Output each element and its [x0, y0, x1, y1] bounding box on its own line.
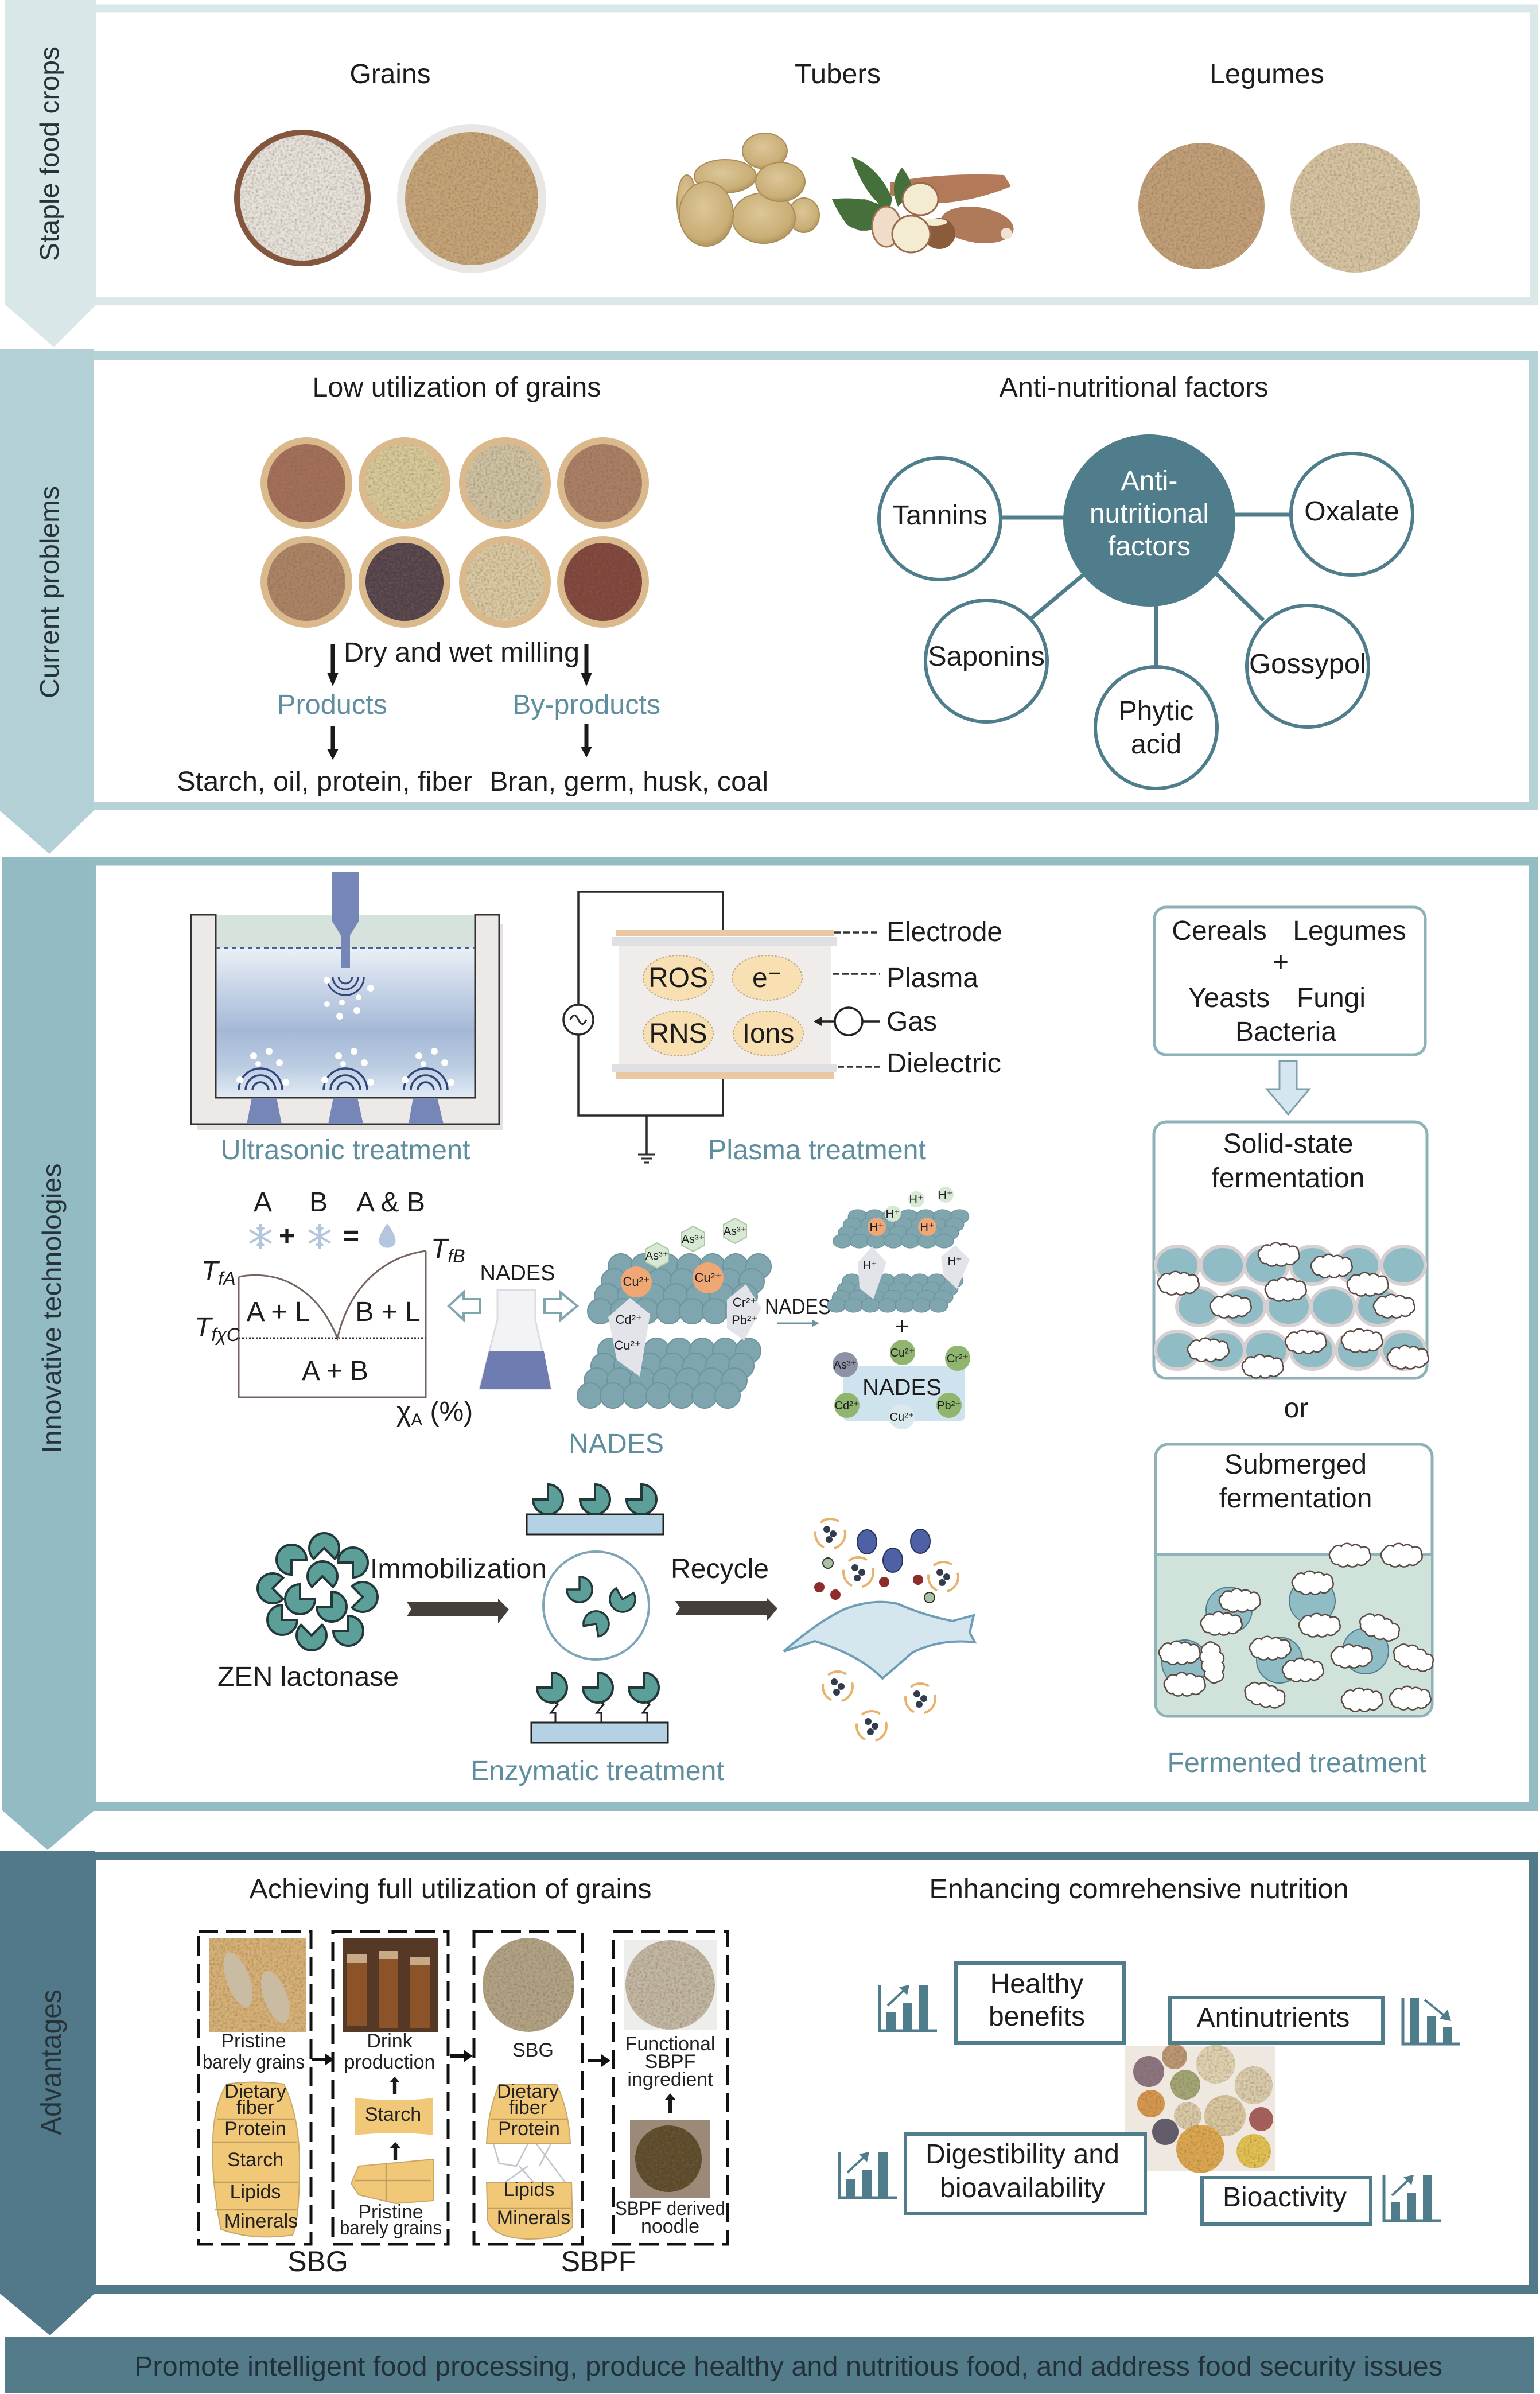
label: immobilization: Immobilization — [370, 1554, 547, 1584]
node: oxalate — [1291, 453, 1413, 575]
arrow: immobilization — [407, 1599, 509, 1623]
diagram: NADES with captured ions: Cu²⁺ — [890, 1347, 915, 1359]
dashed box: SBPF ingredient: noodle — [641, 2216, 699, 2237]
text: by-product list: Bran, germ, husk, coal — [489, 767, 768, 797]
box: antinutrients — [1170, 1997, 1383, 2043]
text: or: or — [1284, 1393, 1308, 1424]
node: saponins: Saponins — [928, 642, 1045, 672]
node: gossypol: Gossypol — [1249, 649, 1366, 679]
photo: eight grain bowls — [260, 437, 649, 628]
panel: innovative technologies — [2, 857, 1533, 1850]
dashed box: drink production: Pristine — [358, 2201, 423, 2223]
dashed box: pristine barley composition: fiber — [236, 2097, 274, 2119]
diagram: regenerated layers: H⁺ — [920, 1221, 934, 1234]
label: enzymatic treatment: Enzymatic treatment — [470, 1756, 724, 1786]
arrows: milling — [327, 644, 592, 686]
illustration: enzyme film and toxins — [784, 1519, 975, 1741]
panel: advantages — [0, 1851, 1533, 2335]
dashed box: pristine barley composition: Pristine — [221, 2030, 286, 2052]
arrow: recycle — [675, 1598, 777, 1622]
node: gossypol — [1247, 605, 1368, 727]
node: phytic acid: acid — [1131, 729, 1181, 760]
diagram: NADES with captured ions: As³⁺ — [834, 1359, 857, 1371]
diagram: NADES with captured ions: Cr²⁺ — [947, 1353, 969, 1365]
immobilized enzyme: top plate — [527, 1484, 663, 1534]
node: tannins: Tannins — [892, 500, 987, 531]
box: fermentation inputs: Yeasts — [1188, 983, 1270, 1013]
box: digestibility and bioavailability: Digestibility and — [925, 2139, 1119, 2170]
arrow: box 3 to 4 — [588, 2054, 610, 2067]
box: solid-state fermentation: fermentation — [1212, 1163, 1364, 1194]
diagram: plasma reactor: e⁻ — [752, 963, 782, 993]
box: fermentation inputs: Cereals — [1172, 916, 1267, 946]
dashed box: drink production — [333, 1931, 448, 2244]
diagram: eutectic phase chart: A — [254, 1187, 272, 1218]
diagram: adsorbent layers with metal ions — [577, 1218, 771, 1408]
label: SBPF: SBPF — [561, 2245, 636, 2278]
diagram: regenerated layers: H⁺ — [863, 1260, 877, 1272]
diagram: plasma reactor — [563, 892, 1002, 1163]
diagram: eutectic phase chart: fB — [448, 1246, 465, 1266]
diagram: eutectic phase chart: A — [411, 1410, 422, 1429]
dashed box: SBPF ingredient: Functional — [625, 2033, 715, 2055]
box: fermentation inputs: Bacteria — [1235, 1017, 1336, 1047]
dashed box: SBG composition: SBG — [512, 2039, 554, 2061]
box: solid-state fermentation: Solid-state — [1223, 1129, 1353, 1159]
label: products: Products — [277, 690, 387, 720]
node: phytic acid — [1095, 667, 1217, 788]
text: product list: Starch, oil, protein, fiber — [177, 767, 472, 797]
diagram: NADES flask — [449, 1261, 577, 1389]
dashed box: SBPF ingredient: SBPF — [645, 2051, 695, 2073]
diagram: eutectic phase chart: T — [431, 1234, 448, 1264]
panel: staple food crops — [5, 0, 1534, 347]
box: antinutrients: Antinutrients — [1197, 2003, 1350, 2033]
dashed box: SBG composition: Dietary — [497, 2081, 559, 2102]
box: fermentation inputs: Fungi — [1297, 983, 1366, 1013]
label: innovative technologies: Innovative technologies — [37, 1163, 67, 1454]
photo: wheat bowl — [397, 124, 546, 273]
diagram: eutectic phase chart: (%) — [422, 1397, 473, 1427]
dashed box: pristine barley composition: barely grains — [203, 2051, 305, 2073]
panel: current problems — [0, 349, 1533, 854]
diagram: plasma reactor: Ions — [742, 1019, 794, 1049]
heading: enhancing nutrition: Enhancing comrehensive nutrition — [930, 1874, 1348, 1905]
diagram: NADES with captured ions: NADES — [862, 1375, 942, 1400]
diagram: eutectic phase chart: T — [195, 1312, 211, 1343]
photo: cassava tubers — [832, 157, 1016, 252]
dashed box: drink production: Drink — [367, 2030, 413, 2052]
heading: tubers: Tubers — [795, 59, 881, 90]
box: digestibility and bioavailability — [905, 2134, 1145, 2213]
dashed box: SBG composition: Minerals — [497, 2207, 570, 2229]
diagram: NADES with captured ions: Cu²⁺ — [890, 1411, 914, 1424]
label: plasma treatment: Plasma treatment — [708, 1135, 926, 1165]
diagram: plasma reactor: RNS — [649, 1019, 707, 1049]
diagram: adsorbent layers with metal ions: Cr²⁺ — [733, 1295, 757, 1309]
diagram: plasma reactor: ROS — [648, 963, 708, 993]
photo: mixed peas — [1290, 143, 1420, 273]
label: recycle: Recycle — [671, 1554, 769, 1584]
heading: anti-nutritional factors: Anti-nutritional factors — [1000, 372, 1268, 403]
label: fermented treatment: Fermented treatment — [1167, 1748, 1426, 1778]
label: NADES desorption step: NADES — [765, 1295, 831, 1319]
node: oxalate: Oxalate — [1304, 496, 1399, 527]
box: submerged fermentation — [1156, 1444, 1437, 1716]
arrow: box 1 to 2 — [312, 2053, 334, 2066]
heading: achieving full utilization: Achieving full utilization of grains — [249, 1874, 652, 1905]
label: current problems: Current problems — [34, 486, 64, 698]
box: submerged fermentation: Submerged — [1224, 1449, 1367, 1480]
hub: anti-nutritional factors: factors — [1108, 531, 1191, 562]
box: digestibility and bioavailability: bioavailability — [940, 2173, 1105, 2203]
icon: rising chart, digestibility — [839, 2152, 897, 2198]
arrows: to outputs — [327, 724, 592, 760]
box: healthy benefits — [956, 1963, 1124, 2043]
box: bioactivity — [1202, 2178, 1371, 2224]
box: bioactivity: Bioactivity — [1223, 2182, 1347, 2213]
diagram: eutectic phase chart: A + L — [247, 1297, 310, 1327]
dashed box: pristine barley composition: Dietary — [224, 2081, 286, 2102]
dashed box: pristine barley composition: Minerals — [224, 2210, 298, 2232]
diagram: adsorbent layers with metal ions: Pb²⁺ — [732, 1313, 758, 1327]
photo: potatoes — [677, 133, 819, 246]
diagram: regenerated layers: H⁺ — [948, 1255, 962, 1268]
dashed box: SBPF ingredient — [613, 1931, 728, 2244]
diagram: regenerated layers — [827, 1187, 970, 1340]
diagram: plasma reactor: Gas — [886, 1006, 937, 1037]
diagram: eutectic phase chart: + — [279, 1221, 295, 1252]
diagram: regenerated layers: H⁺ — [909, 1194, 924, 1206]
label: advantages: Advantages — [35, 1989, 67, 2135]
label: staple food crops: Staple food crops — [34, 46, 64, 261]
diagram: plasma reactor: Dielectric — [886, 1048, 1001, 1079]
box: healthy benefits: benefits — [989, 2002, 1085, 2032]
dashed box: drink production: Starch — [365, 2104, 421, 2125]
box: fermentation inputs: Legumes — [1293, 916, 1406, 946]
diagram: adsorbent layers with metal ions: As³⁺ — [645, 1250, 668, 1262]
diagram: plasma reactor: Plasma — [886, 963, 978, 993]
icon: falling chart, antinutrients — [1403, 1998, 1460, 2044]
node: phytic acid: Phytic — [1119, 696, 1193, 726]
label: ZEN lactonase: ZEN lactonase — [217, 1662, 399, 1692]
diagram: adsorbent layers with metal ions: As³⁺ — [682, 1233, 705, 1246]
diagram: NADES with captured ions: Cd²⁺ — [835, 1400, 859, 1412]
icon: rising chart, healthy benefits — [880, 1985, 937, 2031]
photo: bowls of grains — [1125, 2044, 1275, 2173]
diagram: adsorbent layers with metal ions: Cu²⁺ — [694, 1270, 722, 1285]
diagram: eutectic phase chart: fA — [218, 1268, 236, 1289]
diagram: eutectic phase chart — [195, 1187, 473, 1429]
diagram: plasma reactor: Electrode — [886, 917, 1002, 947]
node: saponins — [925, 600, 1047, 722]
diagram: ultrasonic tank — [191, 872, 503, 1130]
label: NADES desorption step — [765, 1295, 831, 1327]
dashed box: SBG composition: Protein — [498, 2118, 560, 2140]
diagram: NADES flask: NADES — [480, 1261, 555, 1285]
photo: chickpeas — [1138, 143, 1265, 269]
diagram: anti-nutritional factors network — [879, 434, 1413, 788]
box: solid-state fermentation — [1154, 1122, 1429, 1378]
box: fermentation inputs — [1154, 907, 1425, 1055]
encapsulated enzyme capsule — [543, 1552, 649, 1660]
label: by-products: By-products — [512, 690, 660, 720]
diagram: adsorbent layers with metal ions: Cu²⁺ — [623, 1274, 650, 1289]
dashed box: pristine barley composition: Protein — [224, 2118, 286, 2140]
diagram: ZEN lactonase cluster — [251, 1527, 384, 1657]
dashed box: SBPF ingredient: ingredient — [627, 2069, 713, 2090]
hub: anti-nutritional factors — [1063, 434, 1235, 607]
dashed box: SBG composition: fiber — [509, 2097, 547, 2119]
icon: rising chart, bioactivity — [1384, 2175, 1441, 2221]
label: NADES: NADES — [569, 1429, 664, 1459]
diagram: eutectic phase chart: A & B — [356, 1187, 425, 1218]
diagram: adsorbent layers with metal ions: Cu²⁺ — [614, 1338, 641, 1353]
banner: conclusion: Promote intelligent food processing, produce healthy and nutritious food, and address food security issues — [134, 2352, 1442, 2382]
arrow: to fermentation — [1267, 1061, 1309, 1114]
arrow: box 2 to 3 — [450, 2050, 473, 2062]
dashed box: drink production: production — [344, 2051, 435, 2073]
box: healthy benefits: Healthy — [990, 1969, 1083, 1999]
diagram: eutectic phase chart: B — [309, 1187, 328, 1218]
diagram: adsorbent layers with metal ions: Cd²⁺ — [615, 1312, 643, 1327]
diagram: eutectic phase chart: χ — [396, 1397, 411, 1427]
diagram: regenerated layers: H⁺ — [886, 1208, 900, 1221]
dashed box: SBG composition: Lipids — [504, 2179, 554, 2201]
diagram: adsorbent layers with metal ions: As³⁺ — [724, 1225, 746, 1238]
box: submerged fermentation: fermentation — [1219, 1483, 1372, 1514]
dashed box: pristine barley composition — [199, 1931, 311, 2244]
hub: anti-nutritional factors: nutritional — [1090, 499, 1209, 529]
hub: anti-nutritional factors: Anti- — [1121, 466, 1177, 496]
diagram: NADES with captured ions — [833, 1340, 970, 1429]
dashed box: SBG composition — [474, 1931, 582, 2244]
dashed box: drink production: barely grains — [340, 2217, 442, 2239]
dashed box: SBPF ingredient: SBPF derived — [615, 2198, 725, 2220]
immobilized enzyme: tethered plate — [531, 1673, 668, 1743]
label: ultrasonic treatment: Ultrasonic treatment — [220, 1135, 470, 1165]
photo: rice bowl — [234, 130, 371, 266]
diagram: eutectic phase chart: A + B — [302, 1356, 368, 1386]
heading: legumes: Legumes — [1210, 59, 1324, 90]
diagram: eutectic phase chart: = — [343, 1221, 359, 1252]
diagram: regenerated layers: H⁺ — [870, 1221, 884, 1234]
diagram: NADES with captured ions: Pb²⁺ — [937, 1400, 961, 1412]
node: tannins — [879, 458, 1001, 580]
box: fermentation inputs: + — [1273, 947, 1289, 978]
text: dry and wet milling: Dry and wet milling — [344, 638, 580, 668]
diagram: eutectic phase chart: T — [201, 1256, 218, 1287]
dashed box: pristine barley composition: Lipids — [230, 2181, 281, 2203]
banner: conclusion — [5, 2337, 1534, 2393]
heading: low utilization of grains: Low utilization of grains — [312, 372, 601, 403]
diagram: regenerated layers: + — [895, 1312, 909, 1340]
dashed box: pristine barley composition: Starch — [227, 2149, 283, 2171]
diagram: eutectic phase chart: B + L — [355, 1297, 421, 1327]
heading: grains: Grains — [350, 59, 430, 90]
diagram: eutectic phase chart: fχC — [211, 1324, 240, 1345]
label: SBG: SBG — [287, 2245, 348, 2278]
diagram: regenerated layers: H⁺ — [939, 1189, 952, 1202]
